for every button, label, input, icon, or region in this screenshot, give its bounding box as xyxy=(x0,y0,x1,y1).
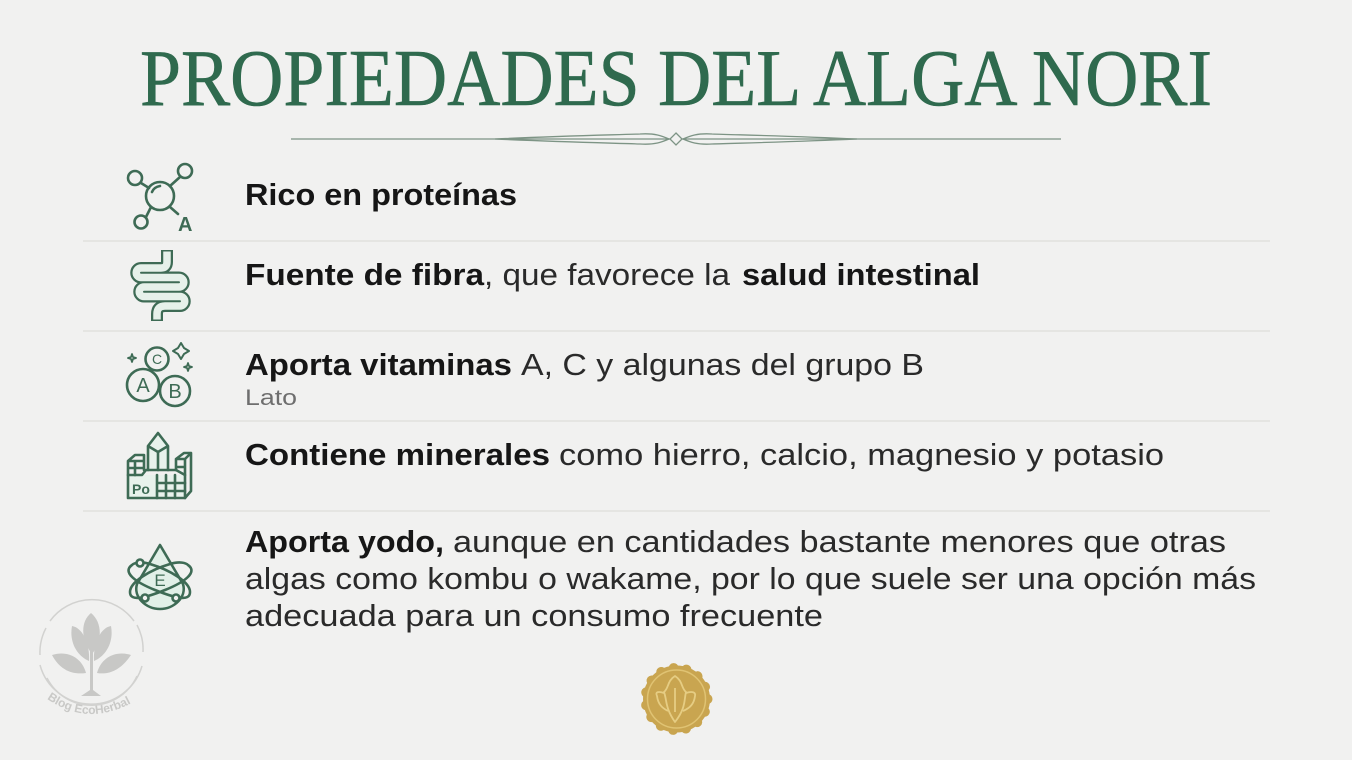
icon: minerals xyxy=(128,433,191,498)
text: minerals: Contiene minerales xyxy=(245,438,550,472)
text: iodine: adecuada para un consumo frecuente xyxy=(245,599,823,633)
text: iodine: algas como kombu o wakame, por lo que suele ser una opción más xyxy=(245,562,1256,596)
text: fibre xyxy=(245,258,980,292)
icon: vitamins: C xyxy=(152,351,162,367)
icon: vitamins: A xyxy=(136,375,150,397)
text: fibre: , que favorece la xyxy=(484,258,730,292)
watermark logo: Blog EcoHerbal xyxy=(39,599,144,714)
text: vitamins: A, C y algunas del grupo B xyxy=(521,348,924,382)
icon: iodine atom xyxy=(129,545,191,609)
text: iodine: aunque en cantidades bastante menores que otras xyxy=(453,525,1226,559)
text: iodine: Aporta yodo, xyxy=(245,525,444,559)
icon: minerals: Po xyxy=(132,481,150,497)
text: iodine xyxy=(245,525,1256,633)
text: minerals: como hierro, calcio, magnesio y potasio xyxy=(559,438,1164,472)
text: fibre: salud intestinal xyxy=(742,258,980,292)
text: protein: Rico en proteínas xyxy=(245,178,517,212)
icon: vitamins: B xyxy=(168,381,182,403)
ornamental title divider xyxy=(291,133,1061,145)
icon: vitamins xyxy=(127,343,192,406)
gold seal xyxy=(643,666,710,732)
watermark logo: Blog EcoHerbal: Blog EcoHerbal xyxy=(48,692,130,714)
text: small note: Lato xyxy=(245,385,297,410)
icon: iodine atom: E xyxy=(154,571,166,590)
text: fibre: Fuente de fibra xyxy=(245,258,485,292)
text: vitamins: Aporta vitaminas xyxy=(245,348,512,382)
icon: molecule xyxy=(128,164,192,236)
title: PROPIEDADES DEL ALGA NORI xyxy=(140,35,1212,123)
text: vitamins xyxy=(245,348,924,382)
text: minerals xyxy=(245,438,1164,472)
icon: molecule: A xyxy=(178,214,192,236)
icon: intestine xyxy=(136,250,185,321)
